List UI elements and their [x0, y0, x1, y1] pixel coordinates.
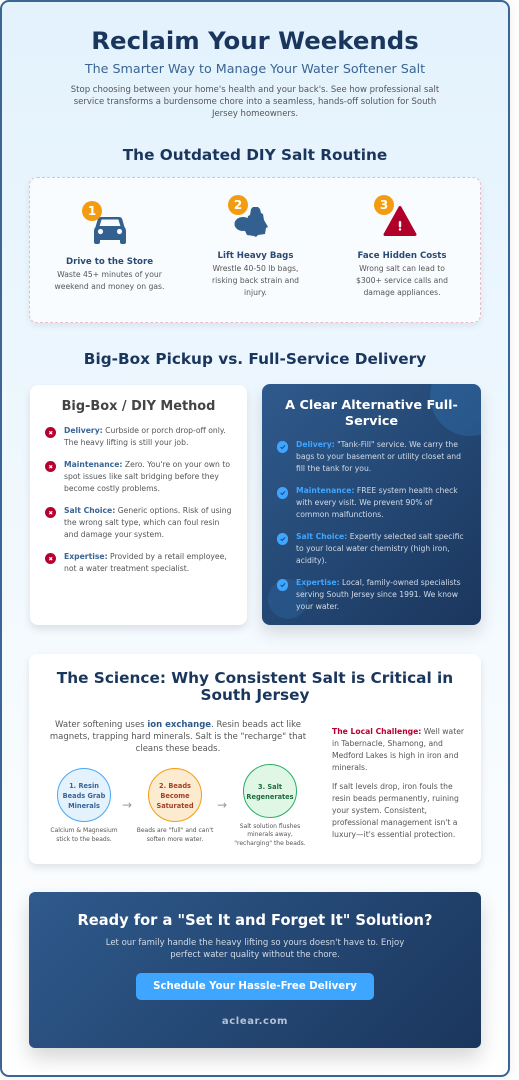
paragraph: local challenge: minerals.: [332, 763, 367, 772]
caption 1: stick to the beads.: [56, 836, 112, 842]
circle 1 label: Beads Grab: [63, 792, 105, 800]
circle 2 label: [156, 782, 194, 810]
caption 1: [50, 827, 118, 842]
step text: Wrestle 40-50 lb bags,: [213, 264, 298, 273]
paragraph: consequence: [332, 780, 459, 840]
text: [64, 426, 226, 447]
ion exchange explanation: Water softening uses ion exchange. Resin beads act like: [55, 720, 301, 730]
step title: Drive to the Store: [66, 256, 153, 266]
cta button: [136, 973, 374, 1000]
paragraph: local challenge: in Tabernacle, Shamong, and: [332, 739, 443, 748]
paragraph: consequence: professional management isn't a: [332, 818, 458, 826]
panel: the science: [29, 654, 481, 864]
process step 3: [234, 764, 306, 846]
circle 3 label: [246, 782, 294, 801]
local challenge text: [332, 726, 472, 841]
text: Salt Choice: Expertly selected salt specific: [296, 532, 464, 541]
panel heading: Big-Box / DIY Method: [62, 399, 215, 414]
process step 2: [137, 768, 214, 842]
item: maintenance: [45, 460, 230, 493]
heading: comparison: Big-Box Pickup vs. Full-Service Delivery: [84, 350, 426, 368]
circle 2 label: Saturated: [156, 802, 194, 810]
circle 2 label: Become: [160, 792, 190, 800]
circle 1 label: Minerals: [68, 802, 100, 810]
panel heading: The Science: Why Consistent Salt is Critical in: [57, 669, 453, 687]
icon: check: [276, 579, 288, 590]
circle 3: [243, 764, 297, 818]
text: The heavy lifting is still your job.: [64, 438, 188, 447]
text: Expertise: Local, family-owned specialists: [296, 578, 461, 587]
icon: check: [276, 487, 288, 498]
step text: $300+ service calls and: [356, 276, 448, 285]
panel heading: [285, 398, 458, 428]
caption 2: [137, 827, 214, 842]
text: the wrong salt type, which can foul resin: [64, 518, 219, 527]
panel: DIY routine steps: [29, 177, 481, 323]
panel: call to action: [29, 892, 481, 1048]
item: salt choice: [45, 506, 231, 539]
website: aclear.com: [222, 1016, 288, 1026]
icon: x: [44, 506, 56, 518]
panel: big-box method: [30, 385, 247, 625]
heading: DIY routine: The Outdated DIY Salt Routine: [123, 146, 387, 164]
text: to your local water chemistry (high iron,: [296, 544, 450, 553]
text: Delivery: Curbside or porch drop-off only.: [64, 426, 226, 435]
step text: [356, 264, 448, 297]
text: become costly problems.: [64, 484, 160, 493]
intro paragraph: service transforms a burdensome chore into a seamless, hands-off solution for South: [74, 97, 436, 107]
title: Reclaim Your Weekends: [91, 26, 419, 55]
paragraph: consequence: resin beads permanently, ruining: [332, 794, 459, 802]
text: [296, 486, 458, 519]
step title: Lift Heavy Bags: [218, 250, 293, 260]
step title: Face Hidden Costs: [357, 250, 446, 260]
caption 3: Salt solution flushes: [240, 822, 300, 830]
ion exchange explanation: [50, 720, 306, 754]
circle 1: [57, 768, 111, 822]
caption 2: soften more water.: [147, 836, 203, 842]
cta heading: Ready for a "Set It and Forget It" Solution?: [78, 912, 432, 929]
badge 2: 2: [234, 198, 242, 212]
text: Maintenance: FREE system health check: [296, 486, 458, 495]
circle 1 label: [63, 782, 105, 810]
text: Expertise: Provided by a retail employee,: [64, 552, 227, 561]
text: and damage your system.: [64, 530, 164, 539]
text: Delivery: "Tank-Fill" service. We carry the: [296, 440, 458, 449]
circle 3 label: 3. Salt: [258, 782, 282, 790]
badge 3: 3: [380, 198, 388, 212]
text: Maintenance: Zero. You're on your own to: [64, 460, 230, 469]
decorative circles: [268, 384, 481, 619]
icon: x: [44, 552, 56, 564]
text: serving South Jersey since 1991. We know: [296, 590, 458, 599]
text: with every visit. We prevent 90% of: [296, 498, 432, 507]
panel heading: South Jersey: [200, 686, 310, 704]
panel: full-service alternative: [262, 384, 481, 625]
item: expertise: [277, 578, 461, 611]
item: expertise: [45, 552, 227, 573]
text: [64, 460, 230, 493]
item: salt choice: [277, 532, 464, 565]
text: Salt Choice: Generic options. Risk of using: [64, 506, 231, 515]
badge 3: [374, 195, 394, 215]
paragraph: consequence: your system. Consistent,: [332, 806, 427, 814]
step text: Waste 45+ minutes of your: [57, 270, 162, 279]
text: common malfunctions.: [296, 510, 384, 519]
text: [64, 552, 227, 573]
icon: check: [276, 533, 288, 544]
paragraph: local challenge: The Local Challenge: Well water: [332, 727, 464, 736]
text: [296, 440, 461, 473]
circle 1 label: 1. Resin: [69, 782, 99, 790]
icon: check: [276, 441, 288, 452]
paragraph: local challenge: [332, 726, 464, 774]
cta text: perfect water quality without the chore.: [170, 950, 340, 960]
step text: risking back strain and: [212, 276, 299, 285]
ion exchange explanation: cleans these beads.: [136, 744, 220, 754]
caption 3: minerals away,: [247, 831, 293, 838]
circle 2: [148, 768, 202, 822]
text: [296, 578, 461, 611]
icon: warning triangle: [384, 206, 417, 236]
ion exchange explanation: magnets, trapping hard minerals. Salt is the "recharge" that: [50, 732, 306, 742]
text: spot issues like salt bridging before they: [64, 472, 219, 481]
process step 1: [50, 768, 118, 842]
caption 1: Calcium & Magnesium: [50, 827, 118, 834]
item: maintenance: [277, 486, 458, 519]
panel heading: A Clear Alternative Full-: [285, 398, 458, 413]
header: [71, 26, 439, 119]
arrow 2: →: [217, 798, 227, 812]
step text: injury.: [244, 288, 267, 297]
text: [296, 532, 464, 565]
caption 3: [234, 822, 306, 846]
icon: x: [44, 426, 56, 438]
text: acidity).: [296, 556, 327, 565]
text: bags to your basement or utility closet and: [296, 452, 461, 461]
badge 1: 1: [88, 204, 96, 218]
arrow 1: →: [122, 798, 132, 812]
step text: Wrong salt can lead to: [359, 264, 445, 273]
step text: [54, 270, 164, 291]
step 3: hidden costs: [356, 195, 448, 297]
icon: car: [94, 217, 126, 244]
cta text: Let our family handle the heavy lifting so yours doesn't have to. Enjoy: [106, 938, 404, 948]
subtitle: The Smarter Way to Manage Your Water Softener Salt: [85, 61, 425, 76]
panel heading: [56, 669, 453, 704]
circle 2 label: 2. Beads: [159, 782, 191, 790]
step 2: lift heavy bags: [212, 195, 299, 297]
circle 3 label: Regenerates: [246, 793, 294, 801]
step text: weekend and money on gas.: [55, 282, 164, 291]
text: your water.: [296, 602, 339, 611]
badge 2: [228, 195, 248, 215]
step 1: drive to the store: [54, 201, 164, 291]
caption 3: "recharging" the beads.: [234, 840, 306, 846]
badge 1: [82, 201, 102, 221]
text: [64, 506, 231, 539]
panel heading: Service: [345, 414, 398, 428]
text: fill the tank for you.: [296, 464, 371, 473]
intro paragraph: [71, 85, 439, 119]
icon: x: [44, 460, 56, 472]
caption 2: Beads are "full" and can't: [137, 827, 213, 834]
icon: heavy bag: [234, 207, 268, 237]
cta text: [29, 937, 481, 961]
paragraph: local challenge: Medford Lakes is high in iron and: [332, 751, 458, 760]
step text: [212, 264, 299, 297]
text: not a water treatment specialist.: [64, 564, 189, 573]
cta button: Schedule Your Hassle-Free Delivery: [153, 981, 357, 992]
intro paragraph: Stop choosing between your home's health and your back's. See how professional salt: [71, 85, 439, 95]
paragraph: consequence: luxury—it's essential protection.: [332, 830, 455, 838]
intro paragraph: Jersey homeowners.: [212, 109, 298, 119]
item: delivery: [277, 440, 461, 473]
paragraph: consequence: If salt levels drop, iron fouls the: [332, 782, 453, 790]
step text: damage appliances.: [363, 288, 441, 297]
item: delivery: [45, 426, 226, 447]
